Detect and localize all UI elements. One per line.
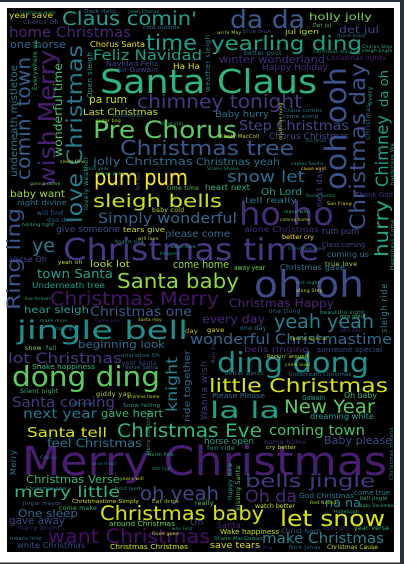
medium and small words: God Christmas	[299, 492, 354, 500]
medium and small words: Snow falling	[123, 403, 160, 409]
word: Claus comin': Claus comin'	[62, 9, 197, 30]
medium and small words: Shane MacGowan	[214, 536, 263, 542]
medium and small words: Nick Jonas	[289, 545, 321, 551]
word: Step Christmas: Step Christmas	[239, 119, 349, 134]
medium and small words: year Santa	[122, 361, 157, 367]
medium and small words: Christmas lights	[326, 54, 387, 62]
medium and small words: Wake happiness	[220, 528, 279, 536]
medium and small words: tidings world	[96, 171, 125, 176]
medium and small words: Oh	[190, 518, 204, 528]
medium and small words: Chorus	[40, 455, 58, 461]
word: hurry vertical: hurry	[371, 200, 393, 257]
medium and small words: front teeth	[115, 486, 142, 492]
word: ride together vertical: ride together	[182, 350, 193, 422]
word: Christmas Eve: Christmas Eve	[117, 421, 262, 442]
medium and small words: bell jingle	[360, 496, 388, 502]
medium and small words: time time	[167, 185, 199, 192]
medium and small words: years will	[120, 476, 144, 482]
medium and small words: Navidad Feliz	[106, 60, 159, 68]
medium and small words: one day	[240, 325, 267, 332]
medium and small words: heart next	[205, 183, 250, 192]
medium and small words: away year	[234, 264, 265, 272]
medium and small words: Happiness Come	[390, 219, 396, 270]
medium and small words: watch better	[255, 503, 296, 510]
medium and small words: coming home	[280, 217, 310, 222]
medium and small words: jul igen	[284, 28, 319, 36]
medium and small words: Oh Lord	[261, 187, 302, 198]
medium and small words: save tears	[210, 540, 260, 550]
medium and small words: Christmas Verse	[26, 474, 120, 486]
word: sleigh bells: sleigh bells	[93, 191, 222, 212]
medium and small words: night divine	[17, 199, 67, 207]
word: wish Merry vertical: wish Merry	[35, 50, 61, 187]
medium and small words: dreaming white	[310, 412, 374, 421]
medium and small words: every day	[202, 312, 265, 326]
medium and small words: bells ringing	[244, 344, 309, 354]
medium and small words: feel Christmas	[47, 437, 142, 450]
word: la la: la la	[210, 397, 280, 424]
medium and small words: cause want	[301, 166, 326, 171]
medium and small words: fall	[46, 345, 57, 352]
medium and small words: lovely weather	[82, 157, 90, 210]
medium and small words: Christmas Happy	[229, 296, 334, 310]
medium and small words: will find	[37, 210, 63, 217]
medium and small words: mig med	[340, 314, 364, 320]
medium and small words: special Special	[290, 336, 327, 342]
medium and small words: gave	[207, 326, 225, 334]
medium and small words: Silent night	[20, 388, 59, 395]
word: Santa coming: Santa coming	[12, 395, 115, 411]
medium and small words: det jul	[339, 25, 379, 36]
medium and small words: Santa may	[138, 317, 162, 322]
medium and small words: watch snow	[170, 244, 197, 249]
word: let snow: let snow	[280, 507, 385, 532]
medium and small words: Last Christmas	[83, 108, 158, 118]
medium and small words: gave heart	[101, 408, 163, 420]
medium and small words: ohh ohh	[340, 328, 362, 334]
medium and small words: tears give	[123, 226, 165, 234]
medium and small words: Christ born	[281, 527, 321, 535]
medium and small words: every	[367, 86, 374, 105]
word: pum pum: pum pum	[94, 165, 188, 191]
medium and small words: someone special	[317, 345, 382, 354]
medium and small words: mistletoe hung	[278, 102, 284, 140]
medium and small words: come along	[283, 114, 318, 120]
medium and small words: sleep One	[60, 159, 85, 165]
medium and small words: Christmas now	[26, 486, 67, 492]
medium and small words: na na	[325, 496, 361, 510]
medium and small words: gonna come	[30, 182, 61, 187]
medium and small words: Open sleigh	[86, 52, 94, 98]
medium and small words: Gawain	[302, 394, 325, 402]
medium and small words: come make	[59, 505, 97, 512]
word: oh oh: oh oh	[254, 263, 364, 306]
medium and small words: town Santa	[37, 266, 113, 281]
medium and small words: Everywhere go	[32, 40, 39, 90]
medium and small words: Kirsty MacColl	[220, 134, 260, 140]
medium and small words: Christmas gave	[280, 263, 345, 272]
medium and small words: Jingle mayor	[22, 501, 62, 507]
word: love Christmas vertical: love Christmas	[63, 45, 87, 223]
medium and small words: next year	[23, 406, 97, 422]
medium and small words: Happy New	[227, 462, 234, 500]
word: wonderful time vertical: wonderful time	[52, 63, 65, 157]
medium and small words: Wanna wish	[200, 361, 210, 420]
medium and small words: merry bright	[18, 525, 60, 532]
medium and small words: yeah oh	[58, 260, 83, 266]
medium and small words: day	[185, 327, 198, 335]
word: merry little: merry little	[14, 484, 120, 501]
medium and small words: yeah Chorus	[128, 9, 160, 15]
word: wonderful Christmastime: wonderful Christmastime	[190, 331, 392, 348]
medium and small words: giddy yap	[96, 390, 132, 398]
word: Santa tell: Santa tell	[27, 426, 107, 441]
word: underneath mistletoe vertical: underneath mistletoe	[9, 65, 20, 177]
word: dong ding: dong ding	[12, 362, 160, 393]
medium and small words: beginning look	[78, 339, 165, 351]
medium and small words: North Pole	[148, 452, 174, 458]
medium and small words: beautiful sight	[320, 310, 365, 316]
medium and small words: who Feliz	[172, 526, 193, 531]
word: lot Christmas: lot Christmas	[8, 350, 122, 367]
medium and small words: Red Nosed	[310, 500, 336, 506]
medium and small words: write May	[217, 30, 242, 36]
medium and small words: mistletoe Oh	[121, 353, 160, 359]
word: jingle bell: jingle bell	[16, 316, 188, 346]
medium and small words: Shake happiness	[32, 363, 95, 371]
medium and small words: thank baby	[337, 33, 365, 39]
medium and small words: Oh baby	[344, 391, 378, 400]
word: New Year: New Year	[284, 396, 375, 418]
medium and small words: Christmas one	[90, 305, 192, 320]
medium and small words: time still	[161, 121, 183, 127]
medium and small words: coming us	[327, 250, 369, 259]
medium and small words: Chorus Santa	[90, 40, 145, 49]
medium and small words: really	[195, 500, 214, 507]
medium and small words: weather sleigh	[204, 34, 212, 92]
word: Christmas baby: Christmas baby	[100, 502, 264, 525]
medium and small words: Baby please	[324, 435, 392, 447]
medium and small words: pa rum	[89, 94, 127, 106]
medium and small words: sugar bag	[96, 118, 121, 124]
medium and small words: right snow	[70, 401, 94, 406]
medium and small words: Merry Christmas	[146, 409, 152, 455]
medium and small words: better pout	[244, 50, 282, 57]
medium and small words: fun ride	[207, 444, 235, 452]
word: Santa baby: Santa baby	[117, 269, 239, 293]
medium and small words: along Step	[296, 288, 323, 294]
medium and small words: Shake Shake	[207, 166, 239, 172]
word: Christmas time: Christmas time	[63, 233, 319, 268]
medium and small words: Christmas dear	[288, 246, 326, 252]
medium and small words: baby want	[10, 189, 65, 200]
word: home Christmas: home Christmas	[9, 25, 131, 41]
word: Oh da: Oh da	[245, 487, 297, 507]
medium and small words: Prospero	[160, 251, 180, 256]
medium and small words: good year	[84, 166, 109, 172]
word: Ring ling vertical: Ring ling	[4, 208, 25, 310]
word: comin' town vertical: comin' town	[14, 57, 35, 180]
medium and small words: cry better	[266, 445, 297, 451]
word: knight vertical: knight	[163, 357, 181, 412]
medium and small words: Thank God	[354, 191, 393, 199]
medium and small words: happiness Wa	[390, 143, 396, 185]
medium and small words: Chorus Oh	[23, 19, 59, 26]
medium and small words: one horse	[10, 39, 66, 51]
medium and small words: Merry	[9, 450, 18, 475]
medium and small words: Claus comes	[284, 108, 322, 114]
medium and small words: give someone	[56, 225, 120, 235]
word: da da: da da	[230, 5, 305, 34]
word: Pre Chorus: Pre Chorus	[93, 116, 237, 144]
word: Christmas day vertical: Christmas day	[346, 63, 371, 230]
medium and small words: live forever	[25, 296, 51, 301]
medium and small words: Angels sing	[115, 239, 144, 245]
medium and small words: hear sleigh	[24, 305, 89, 316]
medium and small words: Christmas Christmas	[110, 543, 189, 551]
medium and small words: snow	[25, 345, 42, 352]
word: ho ho: ho ho	[239, 197, 334, 233]
medium and small words: Christmas	[364, 103, 372, 140]
medium and small words: Verse Santa	[125, 365, 158, 371]
medium and small words: Hallelujah	[334, 509, 359, 515]
word: Simply wonderful: Simply wonderful	[98, 211, 237, 227]
medium and small words: Christmas means	[389, 427, 395, 480]
word: da oh vertical: da oh	[377, 70, 391, 107]
medium and small words: last night	[296, 280, 320, 286]
word: little Christmas: little Christmas	[209, 376, 388, 397]
medium and small words: winter wonderland	[219, 54, 325, 66]
medium and small words: sleigh ride	[380, 283, 390, 333]
medium and small words: Underneath Christmas	[289, 372, 351, 378]
medium and small words: Eat drink	[152, 499, 180, 505]
medium and small words: gave away	[9, 515, 65, 527]
word: chimney tonight: chimney tonight	[137, 92, 302, 113]
word: Merry Christmas: Merry Christmas	[22, 437, 387, 485]
medium and small words: Chorus Step	[362, 44, 392, 50]
medium and small words: come home	[173, 259, 229, 271]
medium and small words: year save	[9, 10, 53, 20]
medium and small words: baby cold	[152, 207, 184, 214]
medium and small words: cold outside	[143, 25, 181, 31]
medium and small words: baby December	[360, 503, 395, 508]
medium and small words: holly jolly	[309, 12, 373, 23]
medium and small words: year Verse	[354, 525, 390, 532]
medium and small words: doo doo	[47, 217, 74, 224]
medium and small words: horse open	[204, 437, 254, 447]
word: Feliz Navidad: Feliz Navidad	[93, 48, 202, 64]
medium and small words: Come join	[95, 318, 120, 324]
word: coming town: coming town	[269, 423, 365, 439]
medium and small words: Christmas yeah	[196, 157, 280, 168]
medium and small words: One sleep	[18, 507, 78, 520]
medium and small words: love most	[92, 461, 117, 467]
medium and small words: Please Please	[212, 392, 265, 400]
medium and small words: home home	[264, 438, 306, 446]
word: Chimney vertical: Chimney	[373, 115, 393, 187]
medium and small words: Sir Gawain	[117, 66, 158, 74]
medium and small words: jolly Christmas	[92, 155, 193, 168]
medium and small words: Joe Jonas	[305, 138, 326, 143]
medium and small words: Christmas Cause	[327, 545, 378, 551]
word: ding dong: ding dong	[217, 346, 369, 379]
medium and small words: Christmas morning	[313, 49, 360, 55]
medium and small words: Rockin' around	[267, 354, 308, 360]
medium and small words: Santa gonna	[323, 526, 354, 532]
medium and small words: Snow Santa	[306, 193, 335, 199]
medium and small words: Santa	[217, 521, 241, 530]
word: bells jingle: bells jingle	[245, 471, 375, 492]
medium and small words: tales glow	[56, 326, 79, 331]
medium and small words: Run run	[211, 339, 217, 363]
medium and small words: blue blue	[243, 29, 272, 35]
medium and small words: promise home	[128, 394, 160, 399]
medium and small words: snow load	[285, 362, 310, 368]
medium and small words: Det jul	[313, 23, 332, 29]
word: Christmas Merry: Christmas Merry	[50, 289, 219, 310]
medium and small words: Nu det	[136, 171, 142, 190]
medium and small words: Verse Oh	[10, 255, 47, 264]
medium and small words: ye	[32, 235, 55, 257]
word: snow let: snow let	[227, 167, 305, 186]
word: yeah yeah: yeah yeah	[274, 312, 374, 333]
medium and small words: Deck Halls	[84, 9, 116, 15]
medium and small words: better watch	[225, 371, 264, 377]
medium and small words: better cry	[282, 233, 314, 241]
medium and small words: true love	[325, 260, 358, 268]
word: ooh ooh vertical: ooh ooh	[319, 67, 353, 190]
medium and small words: will love	[138, 236, 159, 242]
medium and small words: Claus coming	[322, 241, 365, 249]
medium and small words: comes Santa	[291, 161, 323, 167]
word: yearling ding: yearling ding	[211, 32, 362, 55]
medium and small words: San Frang	[327, 201, 352, 207]
medium and small words: Baby hurry	[215, 110, 270, 120]
word: oh yeah: oh yeah	[140, 484, 219, 505]
medium and small words: white Christmas	[17, 541, 85, 550]
word: want Christmas: want Christmas	[48, 525, 210, 548]
word: time: time	[146, 31, 197, 55]
word: Santa Claus: Santa Claus	[100, 63, 317, 101]
medium and small words: alone Christmas	[244, 224, 319, 234]
medium and small words: Christmastime Simply	[72, 499, 140, 505]
medium and small words: means love	[10, 536, 42, 542]
medium and small words: Christmas white	[20, 10, 56, 15]
medium and small words: star high	[152, 466, 172, 471]
medium and small words: look lot	[90, 260, 131, 270]
medium and small words: Good good	[152, 531, 179, 537]
medium and small words: Happy Holiday	[262, 62, 328, 72]
medium and small words: tell really	[245, 196, 298, 205]
medium and small words: next day	[315, 168, 324, 207]
word: make Christmas: make Christmas	[262, 531, 384, 547]
medium and small words: holding tight	[22, 222, 54, 228]
medium and small words: one thing	[269, 308, 301, 315]
medium and small words: Underneath tree	[32, 280, 105, 290]
medium and small words: make mine	[40, 318, 67, 324]
medium and small words: Ha Ha	[173, 62, 200, 71]
medium and small words: sleigh jingle	[362, 48, 392, 54]
medium and small words: around Christmas	[109, 520, 175, 528]
medium and small words: many way	[284, 210, 309, 215]
medium and small words: please come	[165, 229, 230, 240]
medium and small words: kissing Santa	[235, 465, 242, 510]
medium and small words: Yes Christmas	[111, 113, 143, 118]
medium and small words: rum pum	[322, 227, 359, 237]
word: Christmas tree: Christmas tree	[120, 136, 294, 160]
medium and small words: Good King	[250, 545, 273, 550]
medium and small words: Chorus Christmas	[269, 131, 349, 141]
medium and small words: come true	[354, 489, 390, 497]
